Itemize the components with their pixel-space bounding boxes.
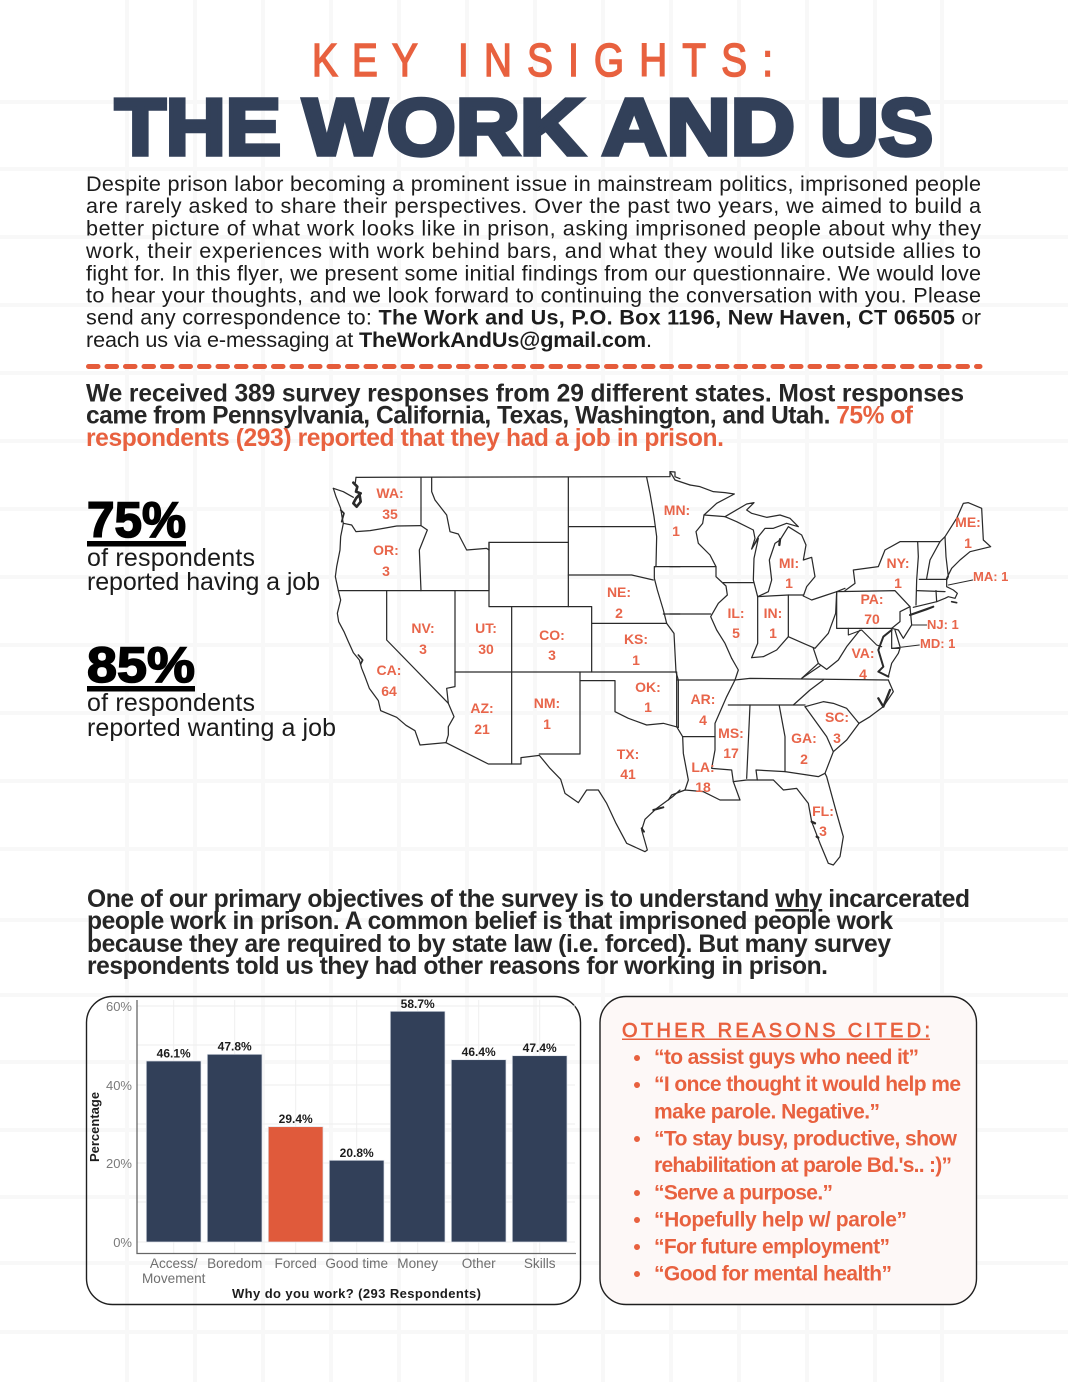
x axis labels: Boredom (207, 1256, 262, 1271)
x axis labels: Money (397, 1256, 438, 1271)
stat: 75 percent had a job: 75% (87, 492, 186, 548)
state response counts: 2 (800, 751, 808, 767)
heading: key insights (312, 35, 773, 86)
intro paragraph (85, 171, 982, 352)
quote list: “For future employment” (654, 1236, 890, 1258)
state response counts: PA: (860, 591, 884, 607)
quote list: “I once thought it would help me (654, 1073, 961, 1096)
heading: key insights: KEY (312, 35, 418, 86)
survey summary text: came from Pennsylvania, California, Texas, Washington, and Utah. 75% of (86, 402, 914, 430)
panel: bar chart why do you work (86, 996, 580, 1304)
quote list: “to assist guys who need it” (654, 1046, 919, 1069)
intro paragraph: send any correspondence to: The Work and Us, P.O. Box 1196, New Haven, CT 06505 or (86, 304, 981, 330)
y axis ticks: 60% (106, 999, 132, 1014)
bar values: 29.4% (279, 1112, 313, 1126)
state response counts: NV: (411, 620, 435, 636)
intro paragraph: fight for. In this flyer, we present some initial findings from our questionnaire. We would love (86, 260, 981, 286)
title: the work and us: THE (115, 82, 281, 172)
state response counts: MA: 1 (973, 569, 1008, 584)
stat: 85 percent wanted a job: 85% (87, 637, 195, 693)
state response counts: VA: (851, 645, 875, 661)
objectives text: respondents told us they had other reasons for working in prison. (87, 953, 828, 980)
state response counts: 1 (644, 699, 652, 715)
y axis title: Percentage (87, 1092, 102, 1162)
state response counts: IL: (727, 605, 745, 621)
x axis labels: Good time (325, 1256, 388, 1271)
state response counts: 1 (632, 652, 640, 668)
bar values (157, 997, 557, 1160)
stat: 75 percent had a job: reported having a job (87, 568, 320, 596)
state response counts: GA: (791, 730, 817, 746)
objectives text: people work in prison. A common belief is that imprisoned people work (87, 908, 893, 935)
survey summary text: respondents (293) reported that they had a job in prison. (86, 425, 724, 452)
x axis labels: Movement (142, 1271, 206, 1286)
state response counts: 64 (381, 683, 397, 699)
quote list: make parole. Negative.” (654, 1100, 880, 1124)
panel heading: OTHER REASONS CITED: (622, 1020, 930, 1042)
y axis ticks: 40% (106, 1078, 132, 1093)
x axis labels: Forced (275, 1256, 317, 1271)
intro paragraph: better picture of what work looks like in prison, asking imprisoned people about why they (86, 216, 981, 240)
state response counts: 18 (695, 779, 711, 795)
state response counts: NM: (534, 695, 560, 711)
state response counts: OK: (635, 679, 661, 695)
x axis labels: Skills (524, 1256, 556, 1271)
title: the work and us: AND (602, 82, 795, 172)
y axis ticks (106, 999, 132, 1250)
state response counts: 2 (615, 605, 623, 621)
objectives text (87, 886, 970, 980)
dashed divider (88, 364, 980, 369)
state response counts: NE: (607, 584, 631, 600)
great lakes states (690, 485, 837, 658)
state response counts: 1 (672, 523, 680, 539)
state response counts: 1 (964, 535, 972, 551)
y axis ticks: 0% (113, 1235, 132, 1250)
quote list: “Hopefully help w/ parole” (654, 1208, 907, 1232)
state response counts: AZ: (470, 700, 494, 716)
bar values: 47.4% (523, 1041, 557, 1055)
bar values: 46.1% (157, 1046, 191, 1060)
state response counts: 30 (478, 641, 494, 657)
stat: 75 percent had a job: of respondents (87, 544, 255, 572)
state response counts: 3 (548, 647, 556, 663)
intro paragraph: to hear your thoughts, and we look forward to continuing the conversation with you. Please (86, 282, 981, 308)
state response counts: NJ: 1 (927, 617, 959, 632)
state response counts: 4 (859, 666, 867, 682)
bar values: 46.4% (462, 1045, 496, 1059)
x axis labels (142, 1256, 556, 1286)
state response counts: 3 (819, 823, 827, 839)
state response counts: LA: (691, 759, 715, 775)
state response counts: WA: (376, 485, 404, 501)
state response counts: IN: (764, 605, 782, 621)
state response counts: 17 (723, 745, 739, 761)
objectives text: because they are required to by state law (i.e. forced). But many survey (87, 931, 891, 958)
quote list: “Serve a purpose.” (654, 1182, 833, 1204)
state response counts: 1 (769, 625, 777, 641)
state response counts: 4 (699, 712, 707, 728)
y axis ticks: 20% (106, 1156, 132, 1171)
survey summary text: We received 389 survey responses from 29 different states. Most responses (86, 380, 964, 408)
chart gridlines (137, 1000, 575, 1253)
quote list: “Good for mental health” (654, 1262, 892, 1286)
bars (146, 1011, 567, 1242)
state response counts: MN: (664, 502, 690, 518)
state response counts: 3 (833, 730, 841, 746)
state response counts: 5 (732, 625, 740, 641)
state response counts: AR: (691, 691, 715, 707)
objectives text: One of our primary objectives of the survey is to understand why incarcerated (87, 886, 970, 913)
bar values: 58.7% (401, 997, 435, 1011)
state response counts: 3 (419, 641, 427, 657)
heading: key insights: INSIGHTS: (458, 35, 773, 86)
state response counts: OR: (373, 542, 399, 558)
state response counts: KS: (624, 631, 648, 647)
state response counts: SC: (825, 709, 849, 725)
state response counts: CA: (377, 662, 401, 678)
intro paragraph: Despite prison labor becoming a prominent issue in mainstream politics, imprisoned people (86, 171, 981, 196)
intro paragraph: are rarely asked to share their perspectives. Over the past two years, we aimed to build a (86, 193, 982, 218)
quote list: rehabilitation at parole Bd.'s.. :)” (654, 1154, 952, 1177)
eastern states outlines (668, 472, 991, 865)
x axis labels: Other (462, 1256, 496, 1271)
intro paragraph: reach us via e-messaging at TheWorkAndUs@gmail.com. (86, 327, 652, 352)
state response counts: 1 (785, 575, 793, 591)
title: the work and us: US (820, 82, 933, 172)
survey summary text (86, 380, 964, 452)
state response counts: CO: (539, 627, 565, 643)
stat: 85 percent wanted a job: reported wanting a job (87, 714, 336, 742)
state response counts: 41 (620, 766, 636, 782)
map of survey responses by state (333, 472, 1008, 865)
state response counts: 1 (543, 716, 551, 732)
stat: 85 percent wanted a job (87, 637, 336, 742)
state response counts: ME: (955, 514, 981, 530)
state response counts (373, 485, 1008, 839)
state response counts: UT: (475, 620, 497, 636)
x axis title: Why do you work? (293 Respondents) (232, 1286, 481, 1301)
state response counts: MD: 1 (920, 636, 955, 651)
state response counts: NY: (886, 555, 910, 571)
title: the work and us: WORK (303, 82, 584, 172)
axes (137, 1000, 576, 1254)
state response counts: FL: (812, 803, 834, 819)
intro paragraph: work, their experiences with work behind bars, and what they would like outside allies to (85, 238, 981, 263)
state response counts: 1 (894, 575, 902, 591)
quote list (634, 1046, 961, 1286)
state response counts: MI: (779, 555, 799, 571)
stat: 75 percent had a job (87, 492, 320, 596)
northeast states (837, 503, 991, 677)
state response counts: 35 (382, 506, 398, 522)
state response counts: 70 (864, 611, 880, 627)
panel: other reasons cited (600, 996, 976, 1304)
x axis labels: Access/ (150, 1256, 198, 1271)
state response counts: 21 (474, 721, 490, 737)
bar values: 47.8% (218, 1040, 252, 1054)
western states outlines (333, 472, 680, 852)
bar values: 20.8% (340, 1146, 374, 1160)
state response counts: 3 (382, 563, 390, 579)
title: the work and us (115, 82, 933, 172)
quote list: “To stay busy, productive, show (654, 1128, 958, 1150)
state response counts: MS: (718, 725, 744, 741)
state response counts: TX: (617, 746, 639, 762)
stat: 85 percent wanted a job: of respondents (87, 689, 255, 717)
